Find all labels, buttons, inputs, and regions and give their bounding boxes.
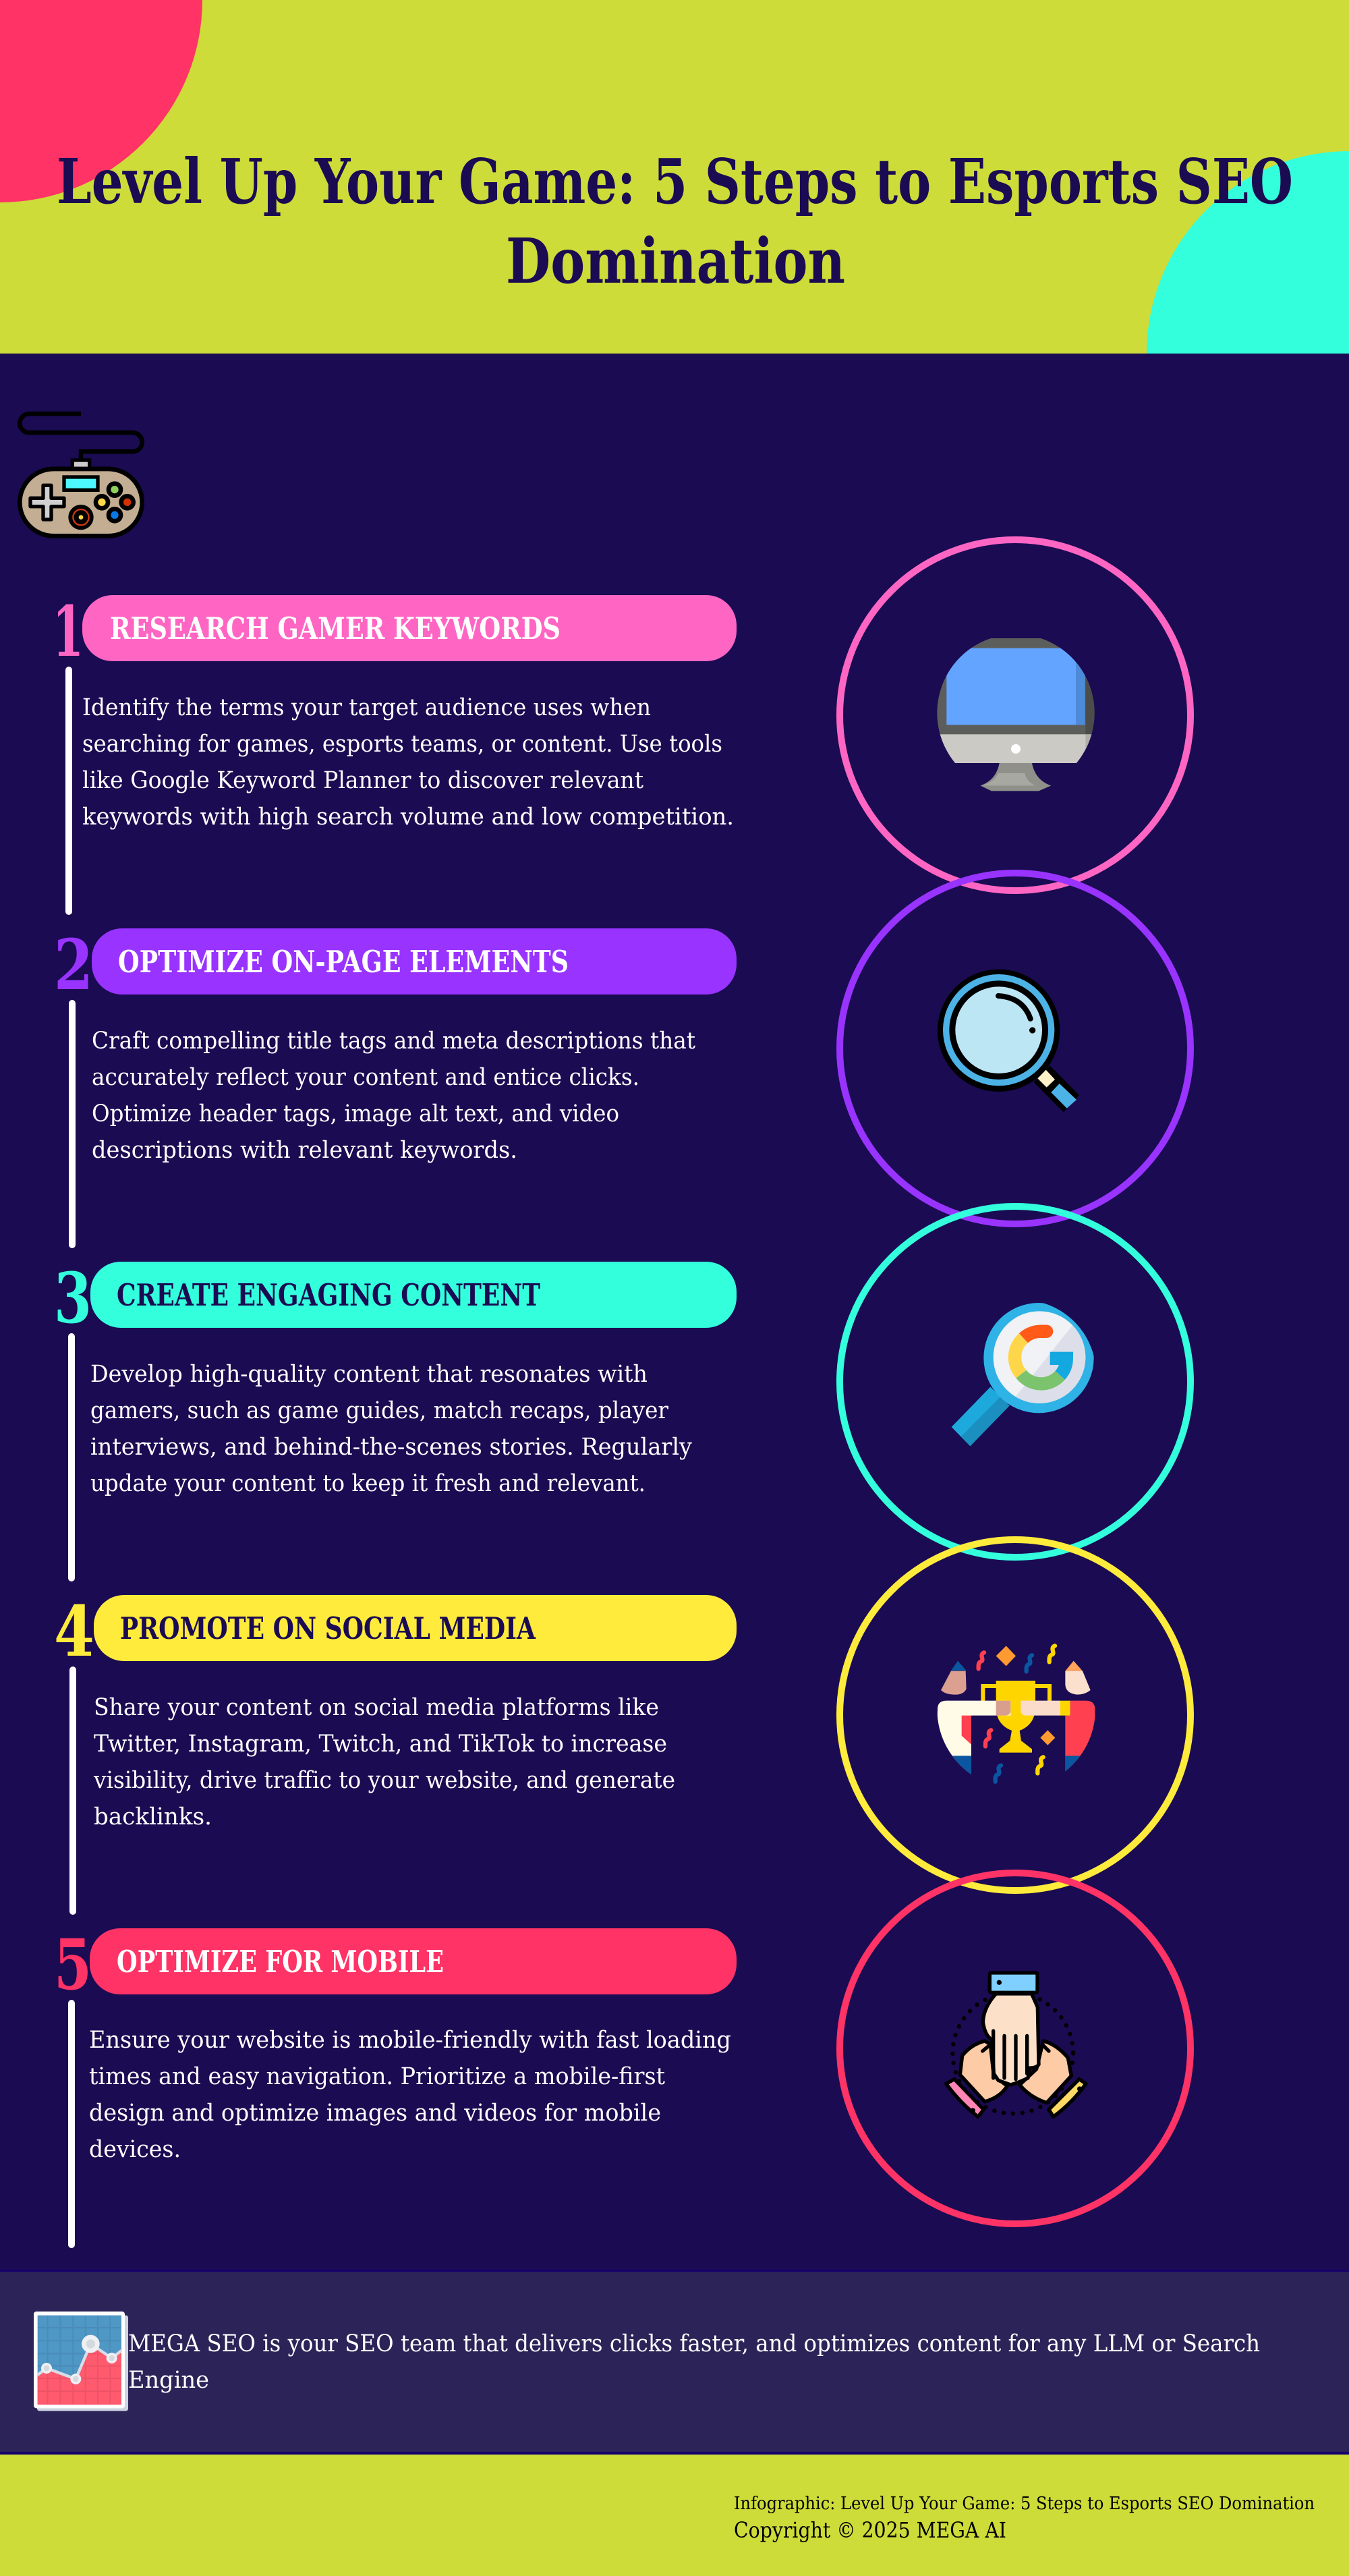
step 3 rule: [68, 1333, 75, 1581]
step 2 heading pill: OPTIMIZE ON-PAGE ELEMENTS: [118, 944, 569, 980]
title: Domination: [506, 225, 845, 298]
footer: [0, 2455, 1349, 2576]
step 1 text: like Google Keyword Planner to discover relevant: [82, 767, 643, 794]
step 4 number: 4: [54, 1591, 94, 1673]
step 3 heading pill: [90, 1262, 737, 1328]
circle ring 5: [840, 1873, 1190, 2224]
step 3 text: interviews, and behind-the-scenes stories. Regularly: [90, 1434, 692, 1461]
circle ring 4: [840, 1540, 1190, 1891]
step 5 heading pill: OPTIMIZE FOR MOBILE: [117, 1944, 444, 1980]
step 5 text: times and easy navigation. Prioritize a mobile-first: [89, 2063, 665, 2090]
step 1 heading pill: RESEARCH GAMER KEYWORDS: [110, 611, 561, 646]
footer caption: Infographic: Level Up Your Game: 5 Steps to Esports SEO Domination: [734, 2494, 1315, 2514]
step 2 heading pill: [92, 928, 737, 995]
step 1 text: [82, 694, 734, 831]
step 4 text: visibility, drive traffic to your website, and generate: [93, 1767, 675, 1794]
icon: team hands: [946, 1973, 1086, 2117]
icon: trophy and celebrating players: [936, 1646, 1097, 1786]
icon: google search magnifier: [952, 1303, 1094, 1446]
icon: magnifying glass: [938, 970, 1079, 1112]
icon: analytics chart: [34, 2312, 128, 2411]
step 3 text: [90, 1361, 692, 1497]
step 5 text: Ensure your website is mobile-friendly with fast loading: [89, 2027, 731, 2054]
step 1 text: searching for games, esports teams, or content. Use tools: [82, 731, 722, 758]
step 2 text: [92, 1028, 695, 1164]
step 5 text: devices.: [89, 2136, 181, 2163]
step 1 text: keywords with high search volume and low competition.: [82, 804, 734, 831]
step 2 text: Craft compelling title tags and meta descriptions that: [92, 1028, 695, 1055]
step 2 text: Optimize header tags, image alt text, and video: [92, 1100, 619, 1127]
step 4 text: Share your content on social media platforms like: [94, 1694, 659, 1721]
step 4 rule: [69, 1667, 76, 1915]
step 2 text: descriptions with relevant keywords.: [92, 1137, 517, 1164]
step 5 number: 5: [54, 1924, 92, 2006]
step 3 text: update your content to keep it fresh and relevant.: [90, 1470, 645, 1497]
step 5: [54, 1924, 737, 2248]
step 1 rule: [65, 667, 72, 915]
step 2 number: 2: [54, 924, 93, 1006]
step 1 number: 1: [53, 591, 84, 673]
step 3: [54, 1258, 737, 1581]
step 5 rule: [68, 2000, 75, 2248]
step 2 text: accurately reflect your content and entice clicks.: [92, 1064, 639, 1091]
step 3 heading pill: CREATE ENGAGING CONTENT: [117, 1277, 540, 1313]
step 4 text: Twitter, Instagram, Twitch, and TikTok to increase: [94, 1731, 667, 1758]
step 3 text: Develop high-quality content that resonates with: [90, 1361, 648, 1388]
step 4: [54, 1591, 737, 1915]
step 4 text: [93, 1694, 675, 1830]
header banner: [0, 0, 1349, 354]
step 3 text: gamers, such as game guides, match recaps, player: [90, 1397, 668, 1424]
promo text: Engine: [128, 2367, 209, 2394]
step 4 heading pill: [94, 1595, 737, 1661]
promo band: [0, 2270, 1349, 2455]
circle ring 1: [840, 540, 1190, 891]
icon: desktop monitor: [936, 638, 1097, 791]
step 1 heading pill: [82, 595, 737, 661]
step 4 text: backlinks.: [94, 1803, 212, 1830]
promo text: [128, 2330, 1260, 2394]
step 2 rule: [69, 1000, 76, 1248]
step 2: [54, 924, 737, 1248]
circle ring 2: [840, 873, 1190, 1224]
step 5 text: design and optimize images and videos for mobile: [89, 2100, 661, 2127]
step 5 text: [89, 2027, 731, 2163]
step 4 heading pill: PROMOTE ON SOCIAL MEDIA: [120, 1611, 536, 1646]
icon: game controller: [20, 414, 142, 536]
promo text: MEGA SEO is your SEO team that delivers clicks faster, and optimizes content for any LLM or Search: [128, 2330, 1260, 2357]
step 1 text: Identify the terms your target audience uses when: [82, 694, 651, 721]
step 5 heading pill: [90, 1928, 737, 1994]
step 3 number: 3: [54, 1258, 92, 1339]
step 1: [53, 591, 737, 915]
circle ring 3: [840, 1206, 1190, 1557]
title: [59, 156, 1291, 283]
copyright: Copyright © 2025 MEGA AI: [734, 2517, 1006, 2543]
